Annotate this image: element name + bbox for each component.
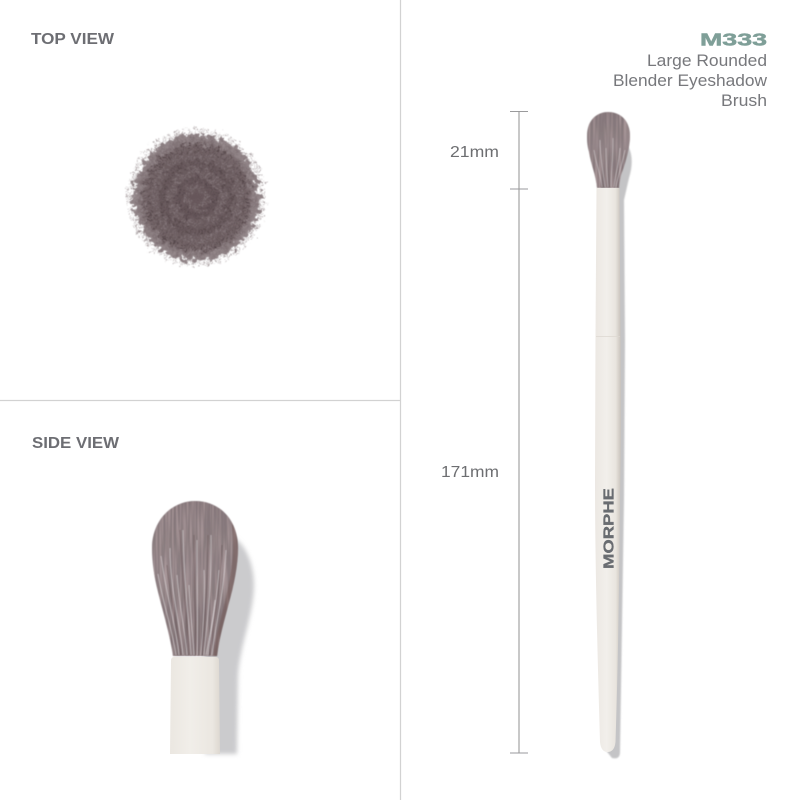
heading: side view: SIDE VIEW (32, 435, 119, 452)
brush tuft seen from above (130, 132, 262, 264)
bristles (587, 112, 630, 188)
product name: Large Rounded (647, 52, 767, 70)
brand wordmark: MORPHE (600, 488, 618, 569)
product code: M333 (700, 30, 767, 50)
product name (613, 52, 767, 110)
label: 21mm: 21mm (450, 144, 499, 161)
ferrule (596, 188, 620, 336)
brush shadow (205, 535, 254, 754)
handle (595, 336, 621, 752)
heading: top view: TOP VIEW (31, 31, 114, 48)
product title block (613, 30, 767, 110)
panel: side view (32, 435, 254, 754)
brush shadow (604, 142, 632, 758)
panel: full brush with dimensions (441, 30, 767, 758)
dimension scale (510, 112, 528, 753)
brush bristles, side view (152, 501, 238, 656)
product name: Brush (721, 92, 767, 110)
label: 171mm: 171mm (441, 464, 499, 481)
ferrule seam (596, 336, 620, 338)
product name: Blender Eyeshadow (613, 72, 767, 90)
full brush (587, 112, 632, 758)
panel dividers (0, 0, 400, 800)
panel: top view (31, 31, 262, 264)
brush handle, side view (170, 657, 220, 754)
